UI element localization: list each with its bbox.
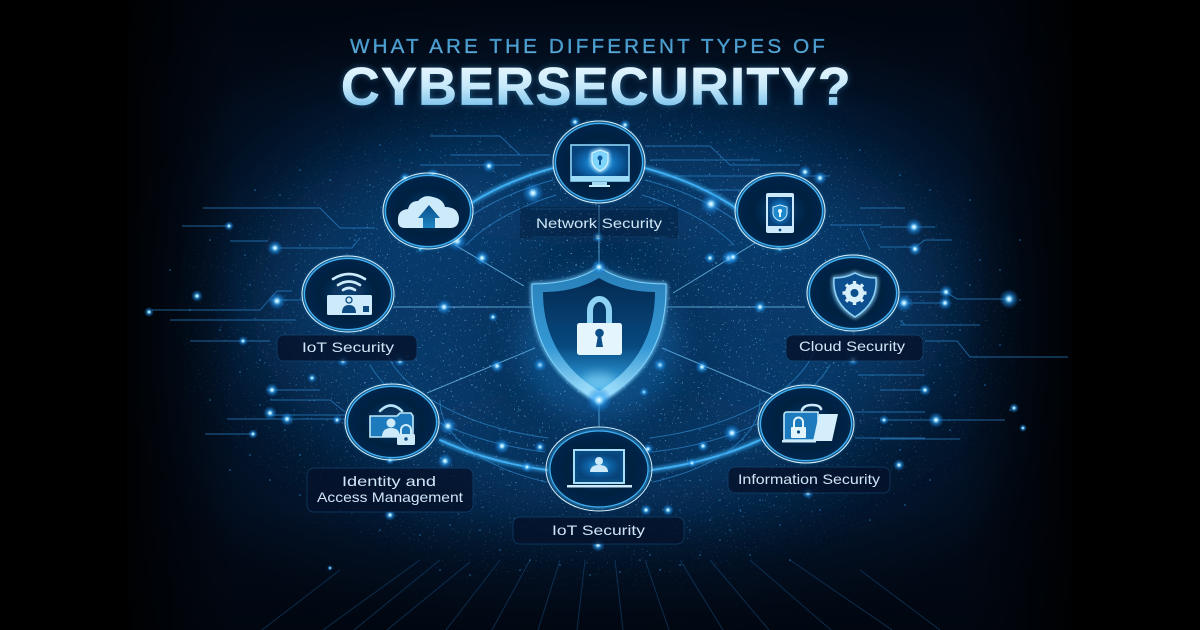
icon: id card with lock bbox=[370, 406, 415, 445]
label: information security: Information Security bbox=[738, 471, 880, 487]
title: CYBERSECURITY? bbox=[341, 58, 852, 116]
infographic canvas bbox=[142, 0, 1068, 630]
label: IoT security bottom bbox=[513, 517, 684, 544]
central shield with padlock bbox=[519, 259, 679, 420]
node: identity and access management bbox=[345, 384, 439, 460]
label: network security bbox=[520, 207, 678, 238]
speckle star field bbox=[167, 100, 1034, 598]
label: cloud security: Cloud Security bbox=[799, 338, 905, 354]
icon: laptop with user bbox=[567, 450, 632, 488]
orbit arcs bbox=[370, 168, 830, 482]
label: identity and access management: Identity and bbox=[342, 473, 436, 489]
node: shield with gear bbox=[807, 255, 899, 331]
node: laptop bbox=[546, 427, 652, 511]
node: IoT router bbox=[302, 256, 394, 332]
node: mobile device bbox=[735, 173, 825, 249]
circuit lines left and right bbox=[152, 136, 1068, 439]
title: CYBERSECURITY? bbox=[341, 58, 852, 116]
connector lines from shield to nodes bbox=[394, 205, 805, 427]
icon: folder with lock bbox=[782, 405, 838, 442]
node: information folder bbox=[758, 385, 854, 463]
label: IoT security left: IoT Security bbox=[302, 339, 394, 355]
icon: monitor with shield bbox=[571, 145, 629, 187]
node: cloud upload bbox=[383, 173, 473, 249]
label: cloud security bbox=[786, 335, 923, 361]
icon: tablet with shield bbox=[766, 193, 794, 233]
perspective floor lines bbox=[262, 560, 940, 630]
fine star dots bbox=[170, 120, 1020, 575]
label: identity and access management bbox=[307, 468, 473, 512]
label: network security: Network Security bbox=[536, 215, 662, 231]
icon: padlock bbox=[577, 299, 622, 355]
icon: wifi router with user bbox=[327, 274, 372, 315]
icon: shield and gear bbox=[834, 273, 876, 317]
label: IoT security bottom: IoT Security bbox=[552, 522, 645, 538]
icon: cloud with arrow bbox=[398, 196, 459, 228]
label: identity and access management: Access Management bbox=[317, 489, 463, 505]
node: network security monitor bbox=[553, 121, 645, 203]
glowing dots bbox=[144, 116, 1027, 571]
title: WHAT ARE THE DIFFERENT TYPES OF bbox=[350, 36, 828, 58]
label: information security bbox=[728, 467, 890, 493]
label: IoT security left bbox=[277, 335, 417, 361]
